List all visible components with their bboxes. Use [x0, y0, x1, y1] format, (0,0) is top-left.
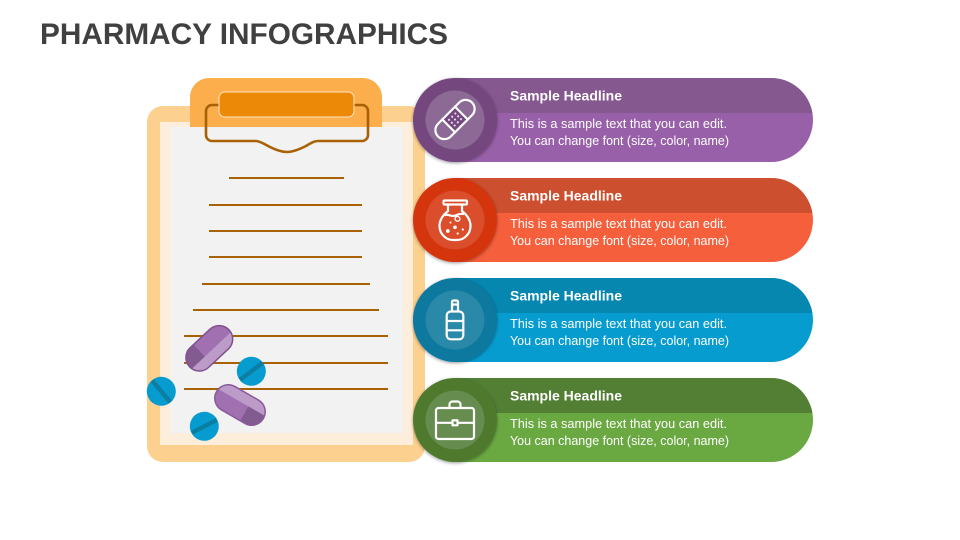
- capsule pill 1: [180, 320, 238, 377]
- icon: bandage: [432, 96, 478, 143]
- headline: Sample Headline: [510, 188, 622, 204]
- clipboard board: [147, 106, 425, 462]
- headline: Sample Headline: [510, 288, 622, 304]
- round tablet 2: [231, 351, 272, 392]
- icon badge: [413, 378, 497, 462]
- icon: flask: [440, 200, 470, 240]
- item 4 band: You can change font (size, color, name): [510, 434, 729, 448]
- item 2 band: You can change font (size, color, name): [510, 234, 729, 248]
- clipboard inner margin: [160, 122, 413, 445]
- item 1 band: You can change font (size, color, name): [510, 134, 729, 148]
- headline: Sample Headline: [510, 388, 622, 404]
- band background: [455, 178, 813, 262]
- body text: This is a sample text that you can edit.: [510, 217, 727, 231]
- body text: This is a sample text that you can edit.: [510, 317, 727, 331]
- item 1 band: [413, 78, 813, 162]
- band background: [455, 378, 813, 462]
- icon badge: [413, 278, 497, 362]
- item 4 band: [413, 378, 813, 462]
- band background: [455, 78, 813, 162]
- paper sheet: [170, 127, 403, 433]
- written lines: [184, 178, 388, 389]
- clip handle: [219, 92, 354, 117]
- item 3 band: You can change font (size, color, name): [510, 334, 729, 348]
- clip outline: [206, 105, 368, 152]
- band background: [455, 278, 813, 362]
- clip tab: [190, 78, 382, 127]
- icon badge: [413, 178, 497, 262]
- clipboard: [141, 78, 425, 462]
- icon badge: [413, 78, 497, 162]
- title: PHARMACY INFOGRAPHICS: [40, 18, 448, 51]
- icon: bottle: [447, 300, 463, 339]
- icon: briefcase: [436, 402, 474, 439]
- round tablet 1: [141, 371, 182, 412]
- body text: This is a sample text that you can edit.: [510, 417, 727, 431]
- body text: This is a sample text that you can edit.: [510, 117, 727, 131]
- round tablet 3: [185, 407, 224, 446]
- item 3 band: [413, 278, 813, 362]
- item 2 band: [413, 178, 813, 262]
- capsule pill 2: [210, 380, 270, 430]
- headline: Sample Headline: [510, 88, 622, 104]
